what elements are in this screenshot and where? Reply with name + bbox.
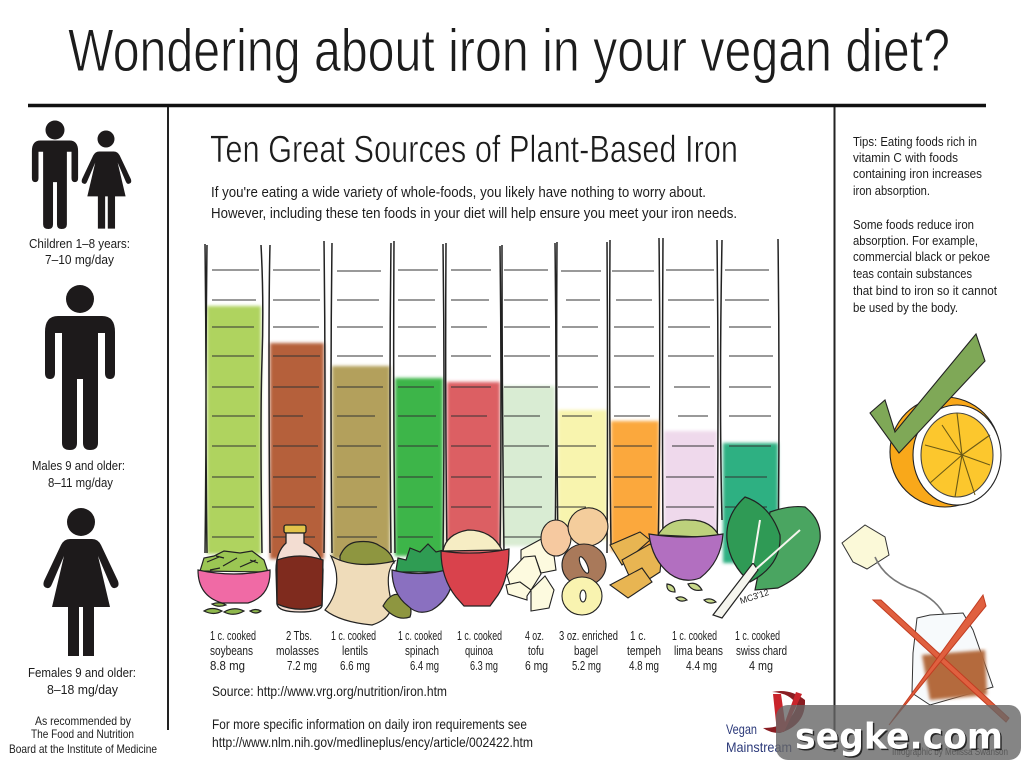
text: source: Source: http://www.vrg.org/nutrition/iron.htm — [212, 683, 447, 699]
panel: tips: vitamin C with foods — [853, 150, 958, 165]
panel: tips: containing iron increases — [853, 166, 982, 181]
panel: tips: absorption. For example, — [853, 233, 978, 248]
label: quinoa: 1 c. cooked — [457, 629, 502, 643]
column outlines — [205, 238, 779, 553]
label: lima beans: lima beans — [674, 644, 723, 658]
label: lima beans: 1 c. cooked — [672, 629, 717, 643]
label: soybeans: 8.8 mg — [210, 659, 245, 673]
label: bagel: 3 oz. enriched — [559, 629, 618, 643]
icon: molasses bottle — [276, 525, 323, 612]
text: male requirement: Males 9 and older: — [32, 458, 125, 473]
label: tempeh — [627, 629, 661, 673]
text: recommendation credit: Board at the Institute of Medicine — [9, 742, 157, 756]
label: soybeans — [210, 629, 256, 673]
label: tofu: 6 mg — [525, 659, 548, 673]
label: swiss chard: 4 mg — [749, 659, 773, 673]
label: molasses: 2 Tbs. — [286, 629, 312, 643]
logo: vegan mainstream: Mainstream — [726, 739, 792, 755]
label: molasses: 7.2 mg — [287, 659, 317, 673]
text: introduction: However, including these ten foods in your diet will help ensure you meet your iron needs. — [211, 205, 737, 222]
panel: tips — [853, 134, 997, 315]
panel: tips: iron absorption. — [853, 183, 930, 198]
icon: soybeans bowl — [198, 551, 270, 614]
label: lima beans — [672, 629, 723, 673]
label: tofu: 4 oz. — [525, 629, 544, 643]
text: introduction — [211, 184, 737, 222]
icon: tempeh slices — [610, 532, 662, 598]
text: more information: http://www.nlm.nih.gov/medlineplus/ency/article/002422.htm — [212, 734, 533, 750]
text: recommendation credit: The Food and Nutrition — [31, 727, 134, 741]
text: female requirement — [28, 665, 136, 697]
label: lentils: 6.6 mg — [340, 659, 370, 673]
watermark: segke.com — [796, 718, 1004, 759]
label: spinach: 1 c. cooked — [398, 629, 442, 643]
text: more information: For more specific information on daily iron requirements see — [212, 716, 527, 732]
icon: boy figure — [32, 120, 78, 229]
icon: lentils sack — [325, 542, 411, 625]
panel: tips: that bind to iron so it cannot — [853, 283, 997, 298]
icon: lemon with check mark — [870, 334, 1001, 507]
label: tempeh: 1 c. — [630, 629, 646, 643]
label: swiss chard: swiss chard — [736, 644, 787, 658]
label: lentils — [331, 629, 376, 673]
panel: tips: Some foods reduce iron — [853, 217, 974, 232]
panel: tips: commercial black or pekoe — [853, 249, 990, 264]
label: bagel: 5.2 mg — [572, 659, 601, 673]
text: male requirement — [32, 458, 125, 490]
icon: girl figure — [82, 130, 131, 229]
text: recommendation credit — [9, 714, 157, 756]
icon: swiss chard — [713, 497, 820, 618]
text: more information — [212, 716, 533, 750]
label: spinach: spinach — [405, 644, 439, 658]
text: artist signature: MC3'12 — [739, 587, 770, 606]
heading: ten great sources: Ten Great Sources of Plant-Based Iron — [210, 129, 738, 171]
label: swiss chard: 1 c. cooked — [735, 629, 780, 643]
text: male requirement: 8–11 mg/day — [48, 475, 113, 490]
label: lima beans: 4.4 mg — [686, 659, 717, 673]
label: bagel: bagel — [574, 644, 598, 658]
text: female requirement: 8–18 mg/day — [47, 682, 118, 697]
text: introduction: If you're eating a wide variety of whole-foods, you likely have nothing to worry about. — [211, 184, 706, 201]
icon: quinoa bowl — [441, 530, 509, 606]
text: children requirement — [29, 236, 130, 267]
icon: female figure — [43, 508, 119, 656]
icon: spinach bowl — [392, 544, 453, 612]
label: soybeans: 1 c. cooked — [210, 629, 256, 643]
text: recommendation credit: As recommended by — [35, 714, 131, 728]
label: quinoa: 6.3 mg — [470, 659, 498, 673]
logo: vegan mainstream: Vegan — [726, 721, 757, 737]
label: molasses — [276, 629, 319, 673]
label: spinach: 6.4 mg — [410, 659, 439, 673]
text: children requirement: Children 1–8 years: — [29, 236, 130, 251]
label: swiss chard — [735, 629, 787, 673]
label: lentils: lentils — [342, 644, 368, 658]
label: tofu — [525, 629, 548, 673]
icon: tofu cubes — [506, 537, 556, 611]
text: female requirement: Females 9 and older: — [28, 665, 136, 680]
label: quinoa — [457, 629, 502, 673]
label: spinach — [398, 629, 442, 673]
text: children requirement: 7–10 mg/day — [45, 252, 114, 267]
tick marks — [212, 270, 773, 537]
label: tofu: tofu — [528, 644, 544, 658]
panel: tips: teas contain substances — [853, 266, 972, 281]
label: bagel — [559, 629, 618, 673]
icon: tea bag crossed out — [842, 525, 1009, 725]
label: molasses: molasses — [276, 644, 319, 658]
watermark: segke.com — [795, 716, 1003, 758]
icon: lima beans bowl — [649, 520, 723, 603]
panel: daily iron requirements — [9, 120, 157, 756]
logo: vegan mainstream — [726, 691, 805, 755]
watermark — [776, 705, 1021, 760]
food labels — [210, 629, 787, 673]
label: lentils: 1 c. cooked — [331, 629, 376, 643]
panel: tips: be used by the body. — [853, 300, 958, 315]
bar chart: iron by food — [205, 238, 779, 563]
panel: tips: Tips: Eating foods rich in — [853, 134, 977, 149]
icon: male figure — [45, 285, 115, 450]
label: soybeans: soybeans — [210, 644, 253, 658]
label: tempeh: tempeh — [627, 644, 661, 658]
label: tempeh: 4.8 mg — [629, 659, 659, 673]
bar fills — [207, 306, 778, 563]
icon: bagels — [541, 502, 613, 615]
label: quinoa: quinoa — [465, 644, 493, 658]
